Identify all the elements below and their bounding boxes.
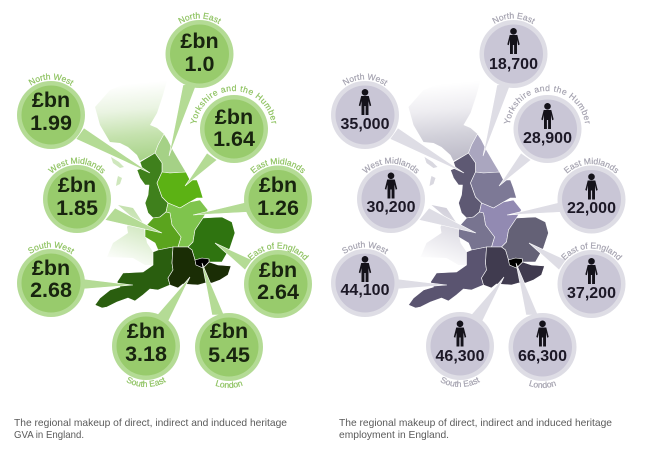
region: South West — [95, 247, 173, 308]
callout: employment South West: 44,100 — [341, 282, 390, 299]
callout: employment North West: 35,000 — [341, 116, 390, 133]
callout: employment Yorkshire and the Humber: Yorkshire and the Humber — [504, 84, 590, 124]
caption: GVA: The regional makeup of direct, indirect and induced heritage — [14, 417, 287, 429]
region: London — [195, 258, 209, 268]
region: London — [508, 258, 522, 268]
callout: employment North East: 18,700 — [489, 56, 538, 73]
panel: employment map of England — [408, 77, 548, 308]
Scotland faded — [408, 77, 482, 161]
callout: employment East of England — [528, 242, 626, 318]
callout: employment South West: South West — [342, 241, 388, 254]
callout: employment North West: North West — [342, 73, 388, 86]
Scotland faded — [95, 77, 168, 161]
region: East of England — [188, 217, 235, 262]
caption: GVA: GVA in England. — [14, 429, 84, 441]
callout: GVA South West: 2.68 — [30, 278, 72, 302]
region: Yorkshire and the Humber — [470, 172, 516, 208]
callout: employment London — [508, 262, 576, 388]
callout: employment East Midlands — [507, 158, 626, 234]
callout: GVA East of England — [214, 242, 312, 318]
callout: employment North East — [480, 12, 548, 156]
callout: GVA South East: 3.18 — [125, 342, 167, 366]
Wales faded — [420, 205, 466, 265]
region: South East — [482, 247, 544, 288]
callout: employment South West — [331, 241, 447, 317]
region: East Midlands — [480, 200, 522, 247]
callout: GVA West Midlands: £bn — [58, 173, 96, 197]
region: East Midlands — [166, 200, 208, 247]
region: North East — [155, 134, 186, 173]
callout: GVA South West: South West — [28, 241, 74, 254]
callout: GVA North West: 1.99 — [30, 111, 72, 135]
Wales faded — [107, 205, 153, 265]
callout: GVA East of England: 2.64 — [257, 280, 299, 304]
callout: employment North West — [331, 73, 464, 174]
callout: GVA North East: £bn — [180, 29, 219, 53]
caption: employment: employment in England. — [339, 429, 449, 441]
callout: employment East Midlands: East Midlands — [564, 158, 618, 174]
caption: employment — [339, 417, 612, 441]
caption: employment: The regional makeup of direct, indirect and induced heritage — [339, 417, 612, 429]
callout: GVA South West: £bn — [32, 256, 70, 280]
callout: GVA East Midlands: £bn — [259, 173, 297, 197]
callout: GVA North West: North West — [28, 73, 74, 86]
callout: GVA London — [195, 262, 263, 388]
region: North West — [137, 153, 168, 218]
callout: GVA South West — [17, 241, 133, 317]
callout: GVA East of England: East of England — [247, 242, 309, 260]
callout: GVA West Midlands: 1.85 — [56, 196, 98, 220]
region: North West — [450, 153, 482, 218]
callout: GVA Yorkshire and the Humber: £bn — [215, 105, 253, 129]
callout: employment Yorkshire and the Humber: 28,900 — [523, 130, 572, 147]
region: East of England — [502, 217, 548, 262]
callout: employment East of England: 37,200 — [567, 285, 616, 302]
callout: employment South East — [426, 276, 504, 388]
callout: employment East Midlands: 22,000 — [567, 200, 616, 217]
callout: GVA North West: £bn — [32, 88, 70, 112]
callout: GVA West Midlands: West Midlands — [48, 157, 105, 174]
islands — [424, 157, 438, 186]
callout: GVA North East: North East — [178, 12, 222, 24]
callout: GVA North East: 1.0 — [185, 52, 214, 76]
callout: GVA Yorkshire and the Humber: 1.64 — [213, 127, 255, 151]
callout: GVA Yorkshire and the Humber — [184, 84, 276, 186]
callout: GVA East of England: £bn — [259, 258, 297, 282]
region: South East — [168, 247, 231, 288]
callout: employment West Midlands: West Midlands — [362, 157, 419, 174]
callout: GVA South East — [112, 276, 190, 388]
callout: employment London: 66,300 — [518, 348, 567, 365]
callout: GVA West Midlands — [43, 157, 162, 234]
callout: GVA London: 5.45 — [208, 343, 250, 367]
callout: employment West Midlands — [357, 157, 476, 234]
callout: employment North East: North East — [492, 12, 536, 24]
callout: employment Yorkshire and the Humber — [498, 84, 590, 186]
region: South West — [408, 247, 486, 308]
callout: employment South East: 46,300 — [436, 348, 485, 365]
region: Yorkshire and the Humber — [157, 172, 203, 208]
caption: GVA — [14, 417, 287, 441]
callout: GVA South East: South East — [126, 377, 166, 388]
callout: employment South East: South East — [440, 377, 480, 388]
callout: GVA North West — [17, 73, 150, 174]
callout: GVA London: £bn — [210, 319, 248, 343]
callout: GVA Yorkshire and the Humber: Yorkshire and the Humber — [190, 84, 276, 124]
region: West Midlands — [458, 212, 494, 250]
panel: GVA map of England — [95, 77, 235, 308]
islands — [111, 157, 124, 186]
callout: employment East of England: East of England — [560, 242, 622, 260]
callout: GVA East Midlands: East Midlands — [250, 158, 305, 174]
region: West Midlands — [145, 212, 181, 250]
callout: employment West Midlands: 30,200 — [367, 199, 416, 216]
callout: GVA North East — [166, 12, 234, 156]
callout: GVA London: London — [216, 380, 243, 388]
callout: GVA East Midlands — [193, 158, 312, 234]
region: North East — [468, 134, 500, 173]
callout: GVA South East: £bn — [127, 319, 165, 343]
callout: GVA East Midlands: 1.26 — [257, 196, 299, 220]
callout: employment London: London — [529, 380, 556, 388]
